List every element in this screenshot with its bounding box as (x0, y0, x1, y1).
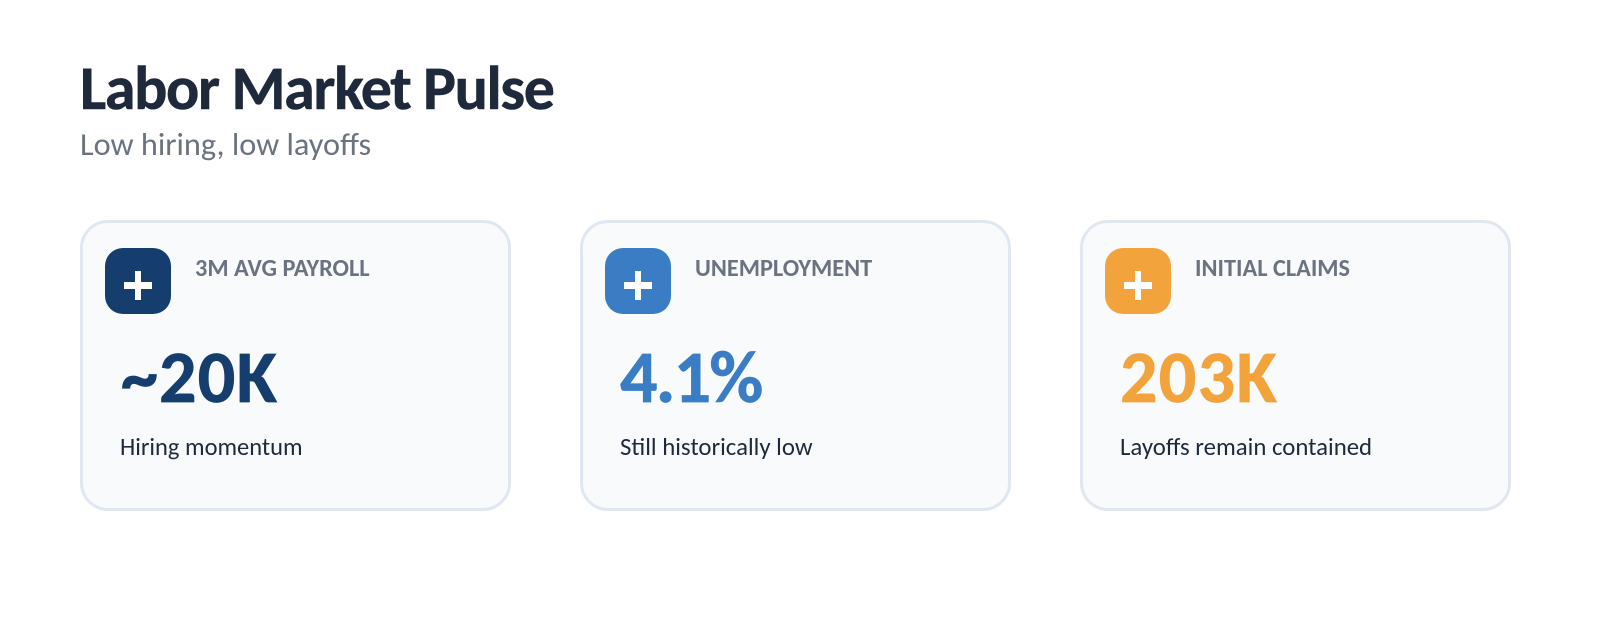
value: 203K: 203K (1120, 332, 1278, 422)
panel: initial claims (1080, 220, 1511, 511)
label: initial claims: INITIAL CLAIMS (1195, 253, 1350, 283)
panel: 3M avg payroll (80, 220, 511, 511)
label: unemployment: UNEMPLOYMENT (695, 253, 872, 283)
title: Labor Market Pulse (80, 50, 554, 126)
value: 4.1%: 4.1% (620, 332, 762, 422)
value: ~20K: ~20K (121, 332, 278, 422)
icon: plus blue (605, 248, 671, 314)
icon: plus orange (1105, 248, 1171, 314)
description: layoffs remain contained: Layoffs remain contained (1120, 431, 1372, 462)
description: still historically low: Still historically low (620, 431, 813, 462)
label: 3M avg payroll: 3M AVG PAYROLL (195, 253, 370, 283)
icon: plus navy (105, 248, 171, 314)
description: hiring momentum: Hiring momentum (120, 432, 303, 462)
subtitle: Low hiring, low layoffs (80, 124, 371, 164)
panel: unemployment (580, 220, 1011, 511)
